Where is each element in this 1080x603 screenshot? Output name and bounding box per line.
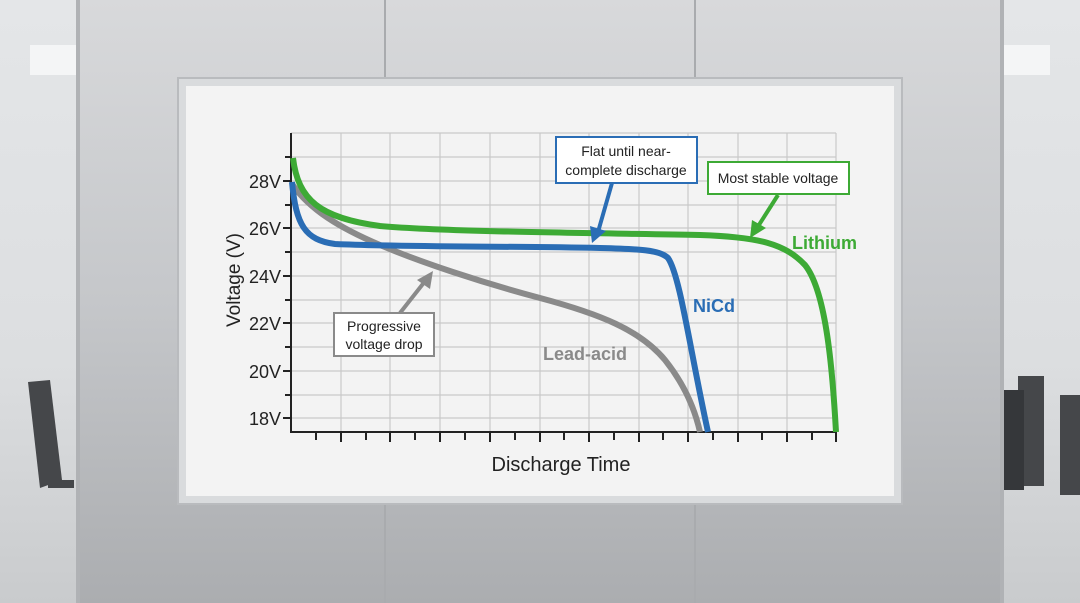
label: NiCd: NiCd [693, 296, 735, 316]
y-axis labels: 22V [249, 314, 281, 334]
label: Lead-acid: Lead-acid [543, 344, 627, 364]
curve: NiCd [292, 182, 708, 432]
callout: progressive voltage drop: voltage drop [345, 336, 423, 352]
y-axis labels: 24V [249, 267, 281, 287]
whiteboard frame [178, 78, 902, 504]
callout: flat until near-complete discharge: complete discharge [565, 162, 687, 178]
callout: most stable voltage: Most stable voltage [718, 170, 839, 186]
callout: most stable voltage [708, 162, 849, 238]
callout: progressive voltage drop [334, 271, 434, 356]
chairs [28, 376, 1080, 495]
y-axis labels [249, 172, 281, 429]
curve: lithium [293, 158, 836, 432]
y-axis labels: 26V [249, 219, 281, 239]
axes [283, 133, 837, 442]
callout: flat until near-complete discharge: Flat until near- [581, 143, 671, 159]
callout: flat until near-complete discharge [556, 137, 697, 243]
y-axis title: Voltage (V) [224, 233, 245, 327]
label: Lithium: Lithium [792, 233, 857, 253]
y-axis labels: 18V [249, 409, 281, 429]
curve: lead-acid [292, 184, 700, 432]
y-axis labels: 28V [249, 172, 281, 192]
x-axis title: Discharge Time [492, 454, 630, 476]
callout: progressive voltage drop: Progressive [347, 318, 421, 334]
chart grid [291, 133, 836, 432]
y-axis labels: 20V [249, 362, 281, 382]
